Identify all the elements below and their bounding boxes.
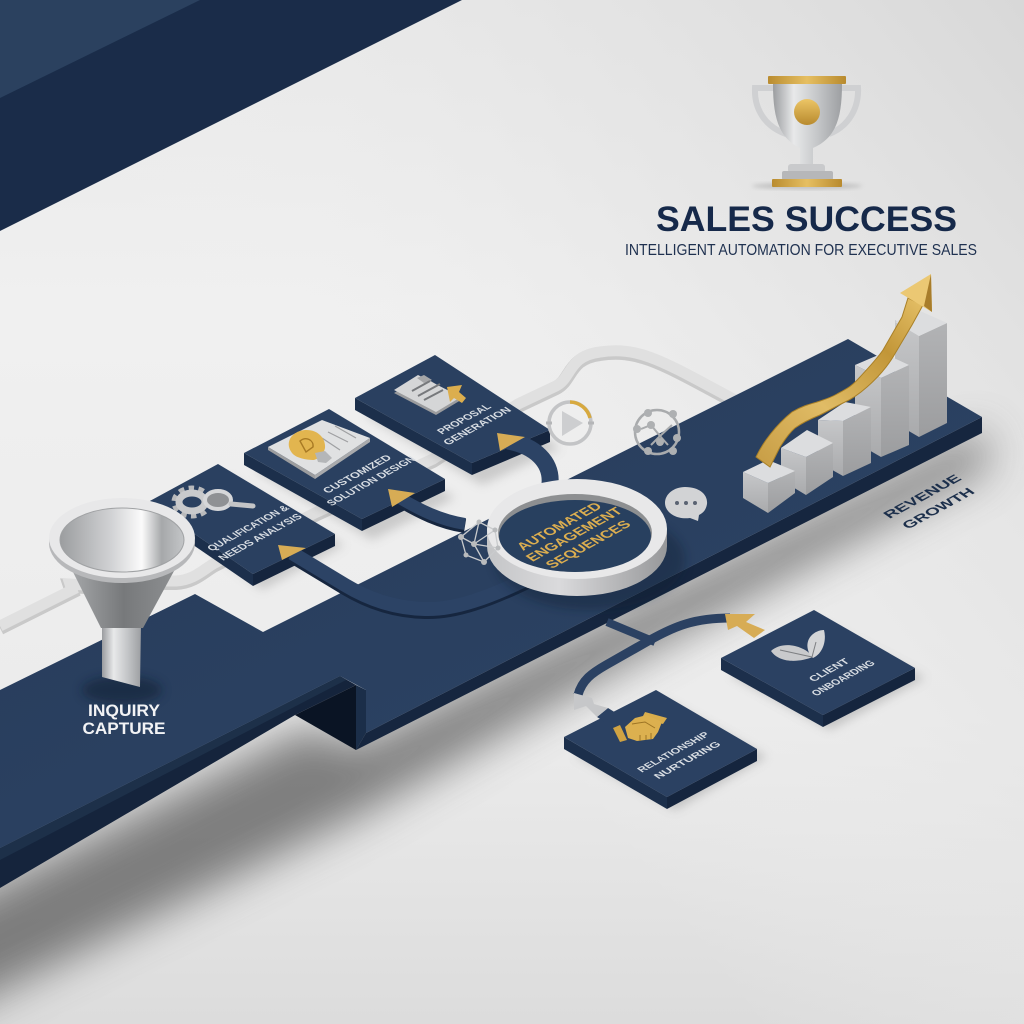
arrow head: silver relationship arrow [574,693,608,717]
bar 5 [895,311,947,437]
label: revenue growth: REVENUE [880,472,965,521]
card: qualification and needs analysis [148,464,344,590]
growth arrow [756,274,932,467]
platform ground shadow [0,430,990,1024]
label: inquiry capture: CAPTURE [82,720,166,738]
top-left navy diagonal band [0,0,462,231]
label: relationship nurturing [635,731,724,781]
bar chart: revenue growth [743,274,947,513]
label: qualification and needs analysis: NEEDS ANALYSIS [217,513,305,563]
icon: chat bubble [665,487,707,521]
arrow: ring to proposal [497,433,550,484]
bar 3 [818,402,871,476]
icon: lightbulb on blueprint [268,420,370,479]
label: revenue growth: GROWTH [898,486,978,531]
connector: relationship to onboarding [578,618,730,695]
label: proposal generation: PROPOSAL [435,402,495,436]
icon: network globe near ring [458,520,500,565]
handles [755,88,858,134]
label: client onboarding: CLIENT [807,657,853,684]
label: customized solution design: SOLUTION DESIGN [325,455,419,508]
bar 4 [855,353,909,457]
icon: gear and magnifier [176,490,253,514]
card: relationship nurturing [564,690,767,810]
funnel: inquiry capture [49,498,195,687]
main navy platform [0,339,982,888]
label: automated engagement sequences: AUTOMATED [512,500,605,553]
arrow: ring to customized design [388,489,465,526]
bar 2 [781,430,833,495]
arrow head: gold onboarding arrow [725,614,765,638]
icon: play cycle [546,402,594,444]
card: proposal generation [355,355,560,485]
label: automated engagement sequences: ENGAGEMENT [522,504,626,564]
card: client onboarding [721,610,925,730]
label: proposal generation: GENERATION [441,406,514,447]
label: relationship nurturing: RELATIONSHIP [635,731,713,774]
label: inquiry capture: INQUIRY [88,702,160,720]
title: SALES SUCCESS [656,200,957,239]
label: automated engagement sequences: SEQUENCES [541,518,634,571]
icon: document with arrow [394,375,466,415]
light background track [0,351,735,628]
label: client onboarding: ONBOARDING [810,659,878,698]
label: revenue growth [880,472,978,531]
trophy [752,76,862,189]
card: customized solution design [244,409,455,540]
subtitle: INTELLIGENT AUTOMATION FOR EXECUTIVE SALES [625,242,977,259]
icon: handshake [613,712,667,742]
icon: network circle [633,409,681,455]
label: relationship nurturing: NURTURING [652,740,724,781]
icon: leaves [771,630,825,661]
label: qualification and needs analysis: QUALIFICATION & [205,504,293,553]
ring: automated engagement sequences [487,479,685,610]
arrow: ring to qualification [278,545,529,611]
label: inquiry capture [82,702,166,738]
label: automated engagement sequences [512,500,634,571]
label: customized solution design: CUSTOMIZED [321,453,395,495]
bar 1 [743,460,795,513]
